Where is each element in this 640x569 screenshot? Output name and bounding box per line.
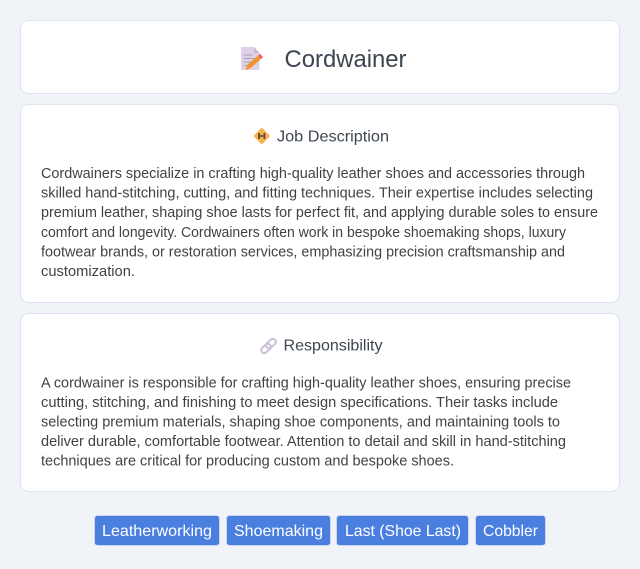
panel: job description [20, 104, 620, 302]
header panel [20, 20, 620, 94]
text block: job description: premium leather, shaping shoe lasts for perfect fit, and applying durable soles to ensure [41, 205, 598, 221]
icon: chain link [260, 338, 277, 354]
heading: responsibility: Responsibility [284, 338, 382, 354]
text block: job description: customization. [41, 264, 135, 280]
icon: document with pencil [241, 47, 263, 70]
text block: job description: footwear brands, or restoration services, emphasizing precision craftsmanship and [41, 244, 565, 260]
text block: responsibility [41, 376, 571, 470]
icon: diamond sign [253, 128, 270, 144]
tags [94, 516, 546, 546]
text block: job description: skilled hand-stitching, cutting, and fitting techniques. Their expertise includes selecting [41, 186, 593, 202]
tag: last (shoe last) [336, 516, 468, 546]
tag: cobbler [476, 516, 546, 546]
text block: responsibility: deliver durable, comfortable footwear. Attention to detail and skill in hand-stitching [41, 434, 566, 450]
heading: job description: Job Description [277, 128, 389, 146]
title: Cordwainer [284, 46, 407, 73]
tag: leatherworking: Leatherworking [102, 523, 212, 540]
text block: responsibility: selecting premium materials, shaping shoe components, and maintaining tools to [41, 414, 560, 430]
text block: responsibility: A cordwainer is responsible for crafting high-quality leather shoes, ensuring precise [41, 376, 571, 392]
tag: leatherworking [94, 516, 220, 546]
panel: responsibility [20, 314, 620, 492]
text block: responsibility: cutting, stitching, and finishing to meet design specifications. Their tasks include [41, 395, 558, 411]
text block: job description: Cordwainers specialize in crafting high-quality leather shoes and accessories through [41, 166, 585, 182]
text block: job description: comfort and longevity. Cordwainers often work in bespoke shoemaking shops, luxury [41, 225, 567, 241]
tag: shoemaking: Shoemaking [234, 523, 323, 540]
tag: cobbler: Cobbler [483, 523, 539, 540]
text block: job description [41, 166, 598, 280]
tag: last (shoe last): Last (Shoe Last) [345, 523, 461, 540]
tag: shoemaking [226, 516, 330, 546]
text block: responsibility: techniques are critical for producing custom and bespoke shoes. [41, 454, 454, 470]
